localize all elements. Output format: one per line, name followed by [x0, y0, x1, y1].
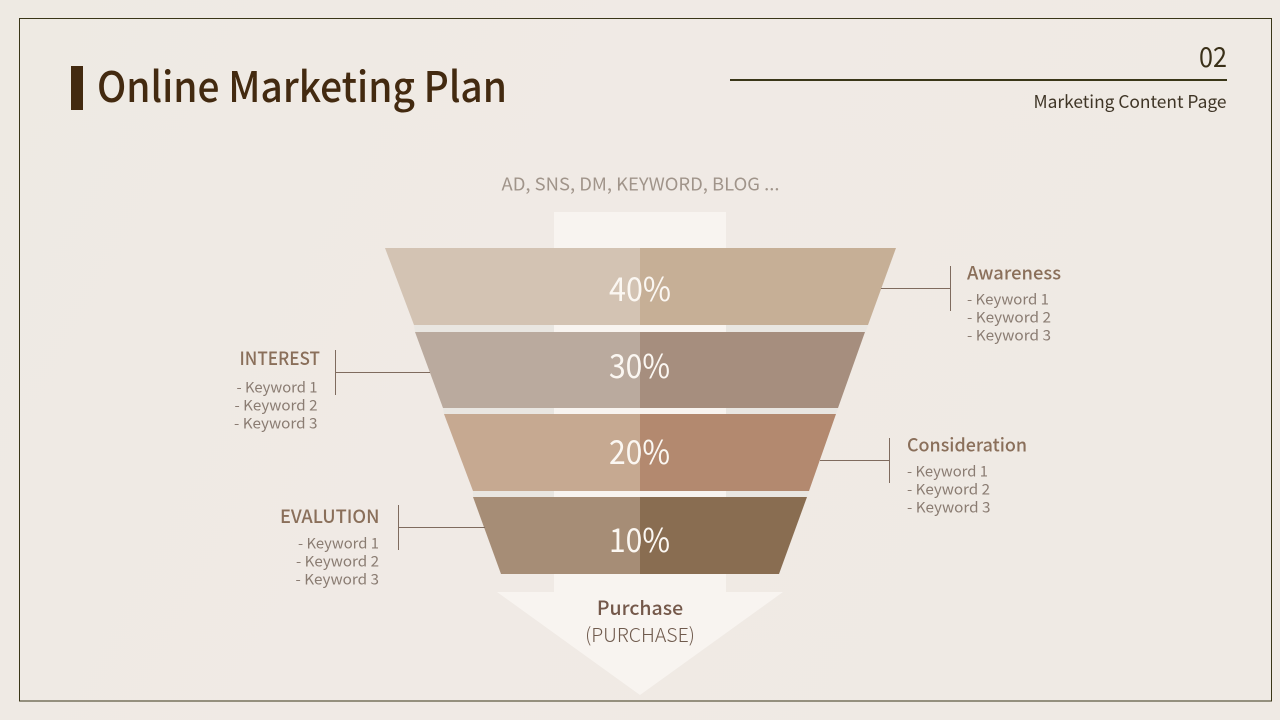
funnel layer: 10%: 10% — [609, 514, 670, 562]
funnel — [385, 248, 896, 574]
callout: INTEREST: - Keyword 1 — [236, 376, 318, 398]
funnel layer: 10% — [473, 497, 807, 574]
funnel layer: 40% — [385, 248, 896, 325]
purchase label: (PURCHASE) — [585, 619, 695, 648]
callout: Awareness — [881, 260, 1061, 346]
callout: EVALUTION: EVALUTION — [280, 503, 380, 529]
subtitle: Marketing Content Page — [1034, 89, 1226, 114]
funnel layer: 20% — [444, 414, 836, 491]
callout: EVALUTION: - Keyword 2 — [296, 550, 379, 572]
background arrow — [497, 212, 783, 695]
callout: EVALUTION: - Keyword 1 — [298, 532, 379, 554]
purchase label: Purchase — [597, 592, 683, 621]
callout: Awareness: - Keyword 3 — [967, 324, 1051, 346]
purchase label — [585, 592, 695, 648]
callout: INTEREST: - Keyword 2 — [234, 394, 318, 416]
title — [71, 54, 507, 115]
callout: INTEREST: INTEREST — [240, 345, 320, 371]
page number: 02 — [1199, 36, 1227, 75]
funnel layer: 40%: 40% — [609, 263, 671, 311]
callout: Awareness: - Keyword 2 — [967, 306, 1051, 328]
funnel layer: 30%: 30% — [609, 340, 670, 388]
header rule — [730, 79, 1227, 81]
funnel layer: 30% — [415, 332, 865, 408]
funnel layer: 20%: 20% — [609, 426, 670, 474]
callout: INTEREST — [234, 345, 430, 434]
callout: INTEREST: - Keyword 3 — [234, 412, 318, 434]
callout: Consideration: - Keyword 2 — [907, 478, 990, 500]
callout: EVALUTION: - Keyword 3 — [296, 568, 379, 590]
title text: Online Marketing Plan — [97, 54, 507, 115]
callout: Consideration — [820, 432, 1027, 518]
callout: EVALUTION — [280, 503, 485, 590]
callout: Consideration: Consideration — [907, 432, 1027, 458]
title accent bar — [71, 66, 83, 110]
callout: Awareness: - Keyword 1 — [967, 288, 1049, 310]
callout: Awareness: Awareness — [967, 260, 1061, 286]
callout: Consideration: - Keyword 3 — [907, 496, 990, 518]
header right — [730, 36, 1227, 114]
channels label: AD, SNS, DM, KEYWORD, BLOG ... — [502, 170, 780, 196]
callout: Consideration: - Keyword 1 — [907, 460, 988, 482]
